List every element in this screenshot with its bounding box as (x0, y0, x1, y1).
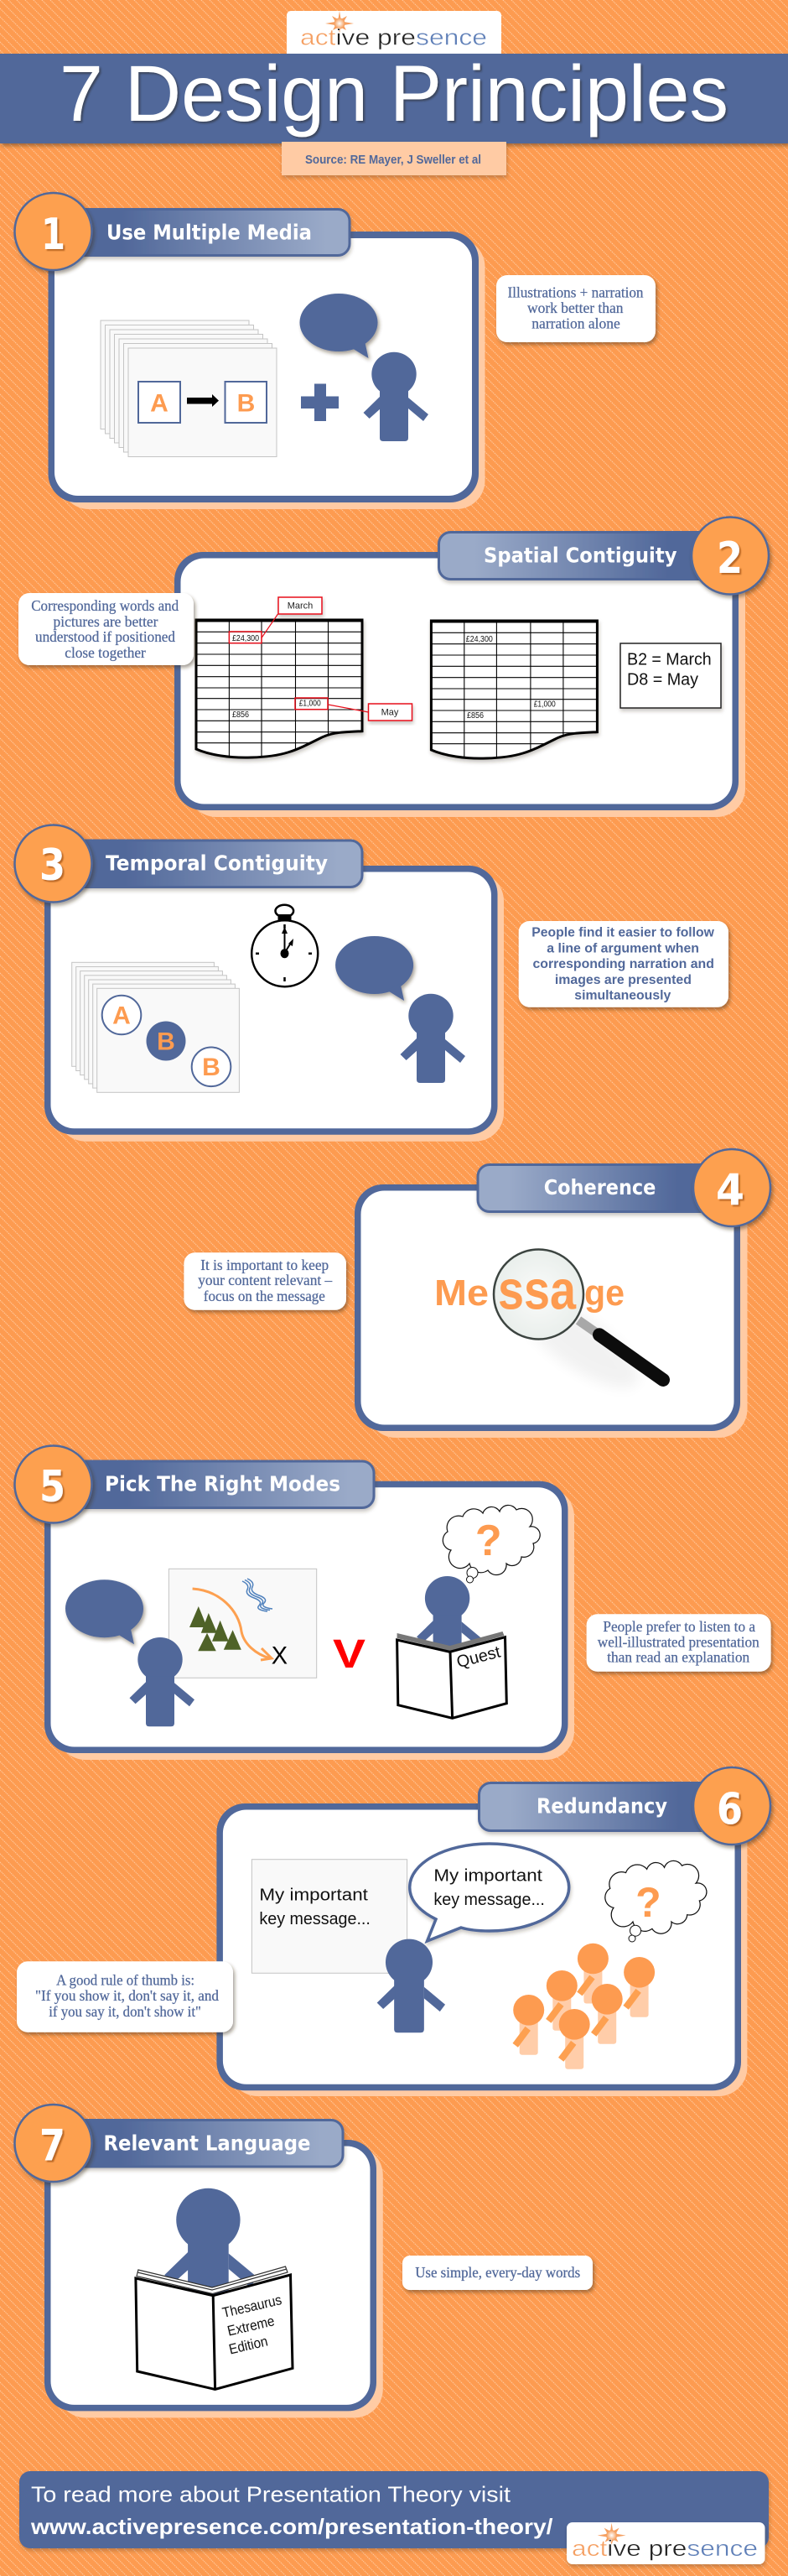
heading: Use Multiple Media (106, 220, 312, 245)
panel: 3 temporal contiguity (15, 825, 728, 1142)
heading: Pick The Right Modes (105, 1471, 340, 1496)
footer banner (19, 2471, 769, 2548)
legend box: B2 = March (627, 651, 712, 669)
speech bubble with key message: key message... (433, 1891, 545, 1909)
number badge: 5 (39, 1462, 65, 1512)
icon: magnifying glass over message: ssa (498, 1259, 577, 1321)
icon: reader with book: Quest (455, 1642, 503, 1672)
spreadsheet with labels: £1,000 (299, 700, 321, 709)
heading (439, 532, 733, 579)
callout: People prefer to listen to a (603, 1618, 755, 1635)
heading: Redundancy (537, 1794, 667, 1819)
source note (282, 142, 506, 175)
slide stack with A to B: A (150, 389, 168, 417)
callout: than read an explanation (607, 1649, 749, 1666)
icon: magnifying glass over message (434, 1250, 663, 1403)
panel: 4 coherence (184, 1149, 770, 1438)
speech bubble with key message: My important (433, 1867, 542, 1886)
spreadsheet with labels: March (288, 601, 313, 611)
logo: top (287, 11, 501, 61)
icon: audience (513, 1944, 655, 2069)
heading (59, 2121, 343, 2167)
spreadsheet with legend keys (430, 621, 598, 760)
icon: thought cloud: ? (475, 1517, 502, 1565)
slide stack with A to B (101, 320, 277, 456)
callout (587, 1614, 771, 1672)
title banner: 7 Design Principles (60, 49, 728, 138)
heading (478, 1164, 734, 1211)
slide stack with A B B: B (157, 1028, 175, 1056)
heading: Spatial Contiguity (484, 544, 677, 568)
number badge (15, 2105, 92, 2182)
number badge (692, 517, 769, 594)
heading (480, 1783, 734, 1830)
number badge: 2 (717, 533, 743, 584)
callout: It is important to keep (200, 1257, 329, 1273)
number badge (15, 193, 92, 270)
callout: your content relevant – (198, 1272, 332, 1288)
slide stack with A B B: B (202, 1054, 220, 1081)
footer banner: www.activepresence.com/presentation-theory/ (30, 2514, 553, 2539)
slide stack with A B B: A (112, 1002, 131, 1030)
versus: V (333, 1632, 365, 1677)
callout (519, 921, 728, 1007)
icon: thought cloud (605, 1860, 707, 1942)
icon: thought cloud (443, 1505, 540, 1583)
callout: close together (65, 644, 146, 661)
icon: reader with thesaurus: Edition (227, 2333, 269, 2357)
spreadsheet with legend keys: £24,300 (466, 635, 493, 644)
callout: well-illustrated presentation (598, 1633, 759, 1650)
callout: People find it easier to follow (531, 926, 715, 940)
callout (402, 2256, 593, 2290)
callout: images are presented (555, 973, 692, 987)
icon: person (364, 352, 428, 441)
callout: corresponding narration and (533, 957, 714, 971)
callout: pictures are better (54, 613, 158, 630)
icon: thought cloud: ? (635, 1879, 661, 1926)
logo: bottom (567, 2522, 765, 2564)
number badge: 3 (39, 840, 65, 891)
number badge: 4 (716, 1166, 744, 1216)
spreadsheet with labels: £24,300 (232, 634, 259, 643)
number badge (693, 1149, 770, 1226)
number badge (15, 825, 92, 903)
heading: Coherence (544, 1175, 656, 1200)
callout (18, 593, 194, 665)
heading (59, 210, 350, 255)
slide stack with A to B: B (237, 389, 255, 417)
callout: focus on the message (204, 1288, 325, 1304)
heading: Temporal Contiguity (106, 851, 328, 876)
callout: Corresponding words and (31, 597, 179, 614)
callout (17, 1961, 233, 2032)
callout: simultaneously (574, 989, 671, 1003)
callout: Illustrations + narration (508, 284, 644, 301)
logo: top: active pre sence (300, 24, 487, 49)
logo: bottom: active pre sence (572, 2536, 758, 2561)
icon: speech bubble (300, 294, 377, 358)
spreadsheet with legend keys: £856 (467, 711, 484, 721)
heading: Relevant Language (104, 2131, 310, 2156)
callout: work better than (527, 299, 624, 316)
icon: person (401, 994, 465, 1083)
spreadsheet with labels (195, 597, 412, 759)
icon: presenter (377, 1939, 445, 2032)
map slide (168, 1569, 317, 1678)
slide stack with A B B (72, 962, 239, 1092)
panel: 5 pick the right modes (15, 1446, 771, 1760)
map slide: X (272, 1642, 288, 1669)
panel: 2 spatial contiguity (18, 517, 769, 817)
callout: Use simple, every-day words (415, 2264, 580, 2281)
callout: if you say it, don't show it" (49, 2003, 201, 2020)
callout: a line of argument when (547, 942, 699, 956)
icon: reader with thesaurus: Extreme (226, 2313, 276, 2339)
icon: reader with book (397, 1576, 506, 1718)
speech bubble with key message (410, 1844, 569, 1941)
icon: plus (301, 384, 339, 421)
heading (59, 1461, 374, 1508)
panel: 7 relevant language (15, 2105, 593, 2417)
slide with key message: key message... (259, 1910, 371, 1928)
icon: reader with thesaurus: Thesaurus (220, 2292, 283, 2321)
slide with key message (251, 1860, 407, 1973)
callout: narration alone (531, 315, 620, 332)
callout (184, 1252, 346, 1310)
footer banner: To read more about Presentation Theory visit (31, 2481, 511, 2506)
icon: reader with thesaurus (136, 2188, 293, 2389)
icon: speech bubble (65, 1579, 143, 1644)
icon: magnifying glass over message: ge (584, 1272, 625, 1314)
spreadsheet with legend keys: £1,000 (534, 700, 556, 710)
source note: Source: RE Mayer, J Sweller et al (305, 153, 481, 167)
spreadsheet with labels: May (381, 708, 399, 718)
panel: 1 use multiple media (15, 193, 656, 509)
icon: magnifying glass over message: Me (434, 1272, 489, 1314)
callout: A good rule of thumb is: (56, 1972, 194, 1989)
number badge (693, 1767, 770, 1845)
callout (496, 275, 656, 342)
number badge: 6 (717, 1784, 743, 1834)
number badge: 1 (41, 210, 65, 260)
slide with key message: My important (259, 1886, 368, 1905)
number badge: 7 (39, 2121, 65, 2172)
spreadsheet with labels: £856 (232, 710, 249, 720)
callout: understood if positioned (35, 628, 175, 645)
callout: "If you show it, don't say it, and (35, 1987, 219, 2004)
icon: speech bubble (335, 936, 413, 1001)
heading (59, 840, 362, 887)
panel: 6 redundancy (17, 1767, 770, 2096)
legend box: D8 = May (627, 671, 698, 690)
icon: stopwatch (251, 905, 318, 986)
icon: presenter (129, 1637, 194, 1726)
legend box (620, 643, 721, 708)
number badge (15, 1446, 92, 1523)
